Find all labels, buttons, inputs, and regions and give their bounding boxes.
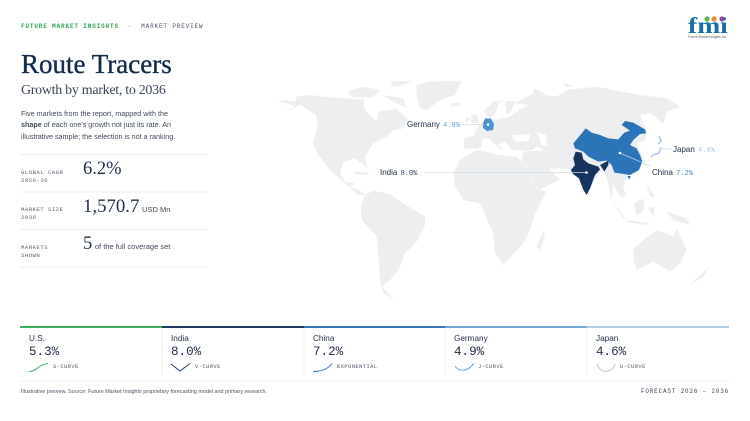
name: Japan: Japan <box>596 334 618 343</box>
value: Germany: 4.9% <box>454 345 484 359</box>
stat: markets shown: MARKETS <box>21 244 48 251</box>
map label: Japan: Japan 4.6% <box>673 145 715 155</box>
label: exponential: EXPONENTIAL <box>337 364 378 370</box>
subtitle: Growth by market, to 2036 <box>21 83 166 98</box>
stat: global CAGR: 6.2% <box>83 159 122 179</box>
name: Germany: Germany <box>454 334 488 343</box>
leader: Japan <box>660 148 672 150</box>
leader: India <box>424 172 586 174</box>
logo: Future Market Insights Inc. <box>688 34 727 38</box>
name: China: China <box>313 334 334 343</box>
map label: China: China 7.2% <box>652 168 693 178</box>
map label: Germany: Germany 4.9% <box>407 120 460 130</box>
curve: S-curve <box>29 363 48 372</box>
stat: markets shown: SHOWN <box>21 252 40 259</box>
marker dots <box>487 123 621 174</box>
intro text: Five markets from the report, mapped with the <box>21 108 168 118</box>
eyebrow: FUTURE MARKET INSIGHTS · MARKET PREVIEW <box>21 23 203 30</box>
country: China <box>573 121 646 179</box>
logo: fmi <box>688 13 728 38</box>
intro text: illustrative sample; the selection is not a ranking. <box>21 132 175 141</box>
curve: V-curve <box>170 363 190 372</box>
label: J-curve: J-CURVE <box>478 364 504 370</box>
label: U-curve: U-CURVE <box>620 364 646 370</box>
map label: India: India 8.0% <box>380 168 417 178</box>
intro text: shape of each one's growth not just its rate. An <box>21 120 171 129</box>
stat: global CAGR: 2026-36 <box>21 176 48 184</box>
name: India: India <box>171 334 189 343</box>
forecast range: FORECAST 2026 – 2036 <box>641 388 729 395</box>
value: U.S.: 5.3% <box>29 345 59 359</box>
stat: global CAGR: GLOBAL CAGR <box>21 168 63 176</box>
curve: exponential <box>313 363 332 372</box>
curve: J-curve <box>454 363 474 371</box>
stat: global CAGR <box>21 159 122 184</box>
country: Germany <box>483 118 494 131</box>
market strip <box>20 326 729 382</box>
value: Japan: 4.6% <box>596 345 626 359</box>
stat: market size <box>21 196 170 221</box>
name: U.S.: U.S. <box>29 334 45 343</box>
intro text <box>21 108 175 141</box>
label: S-curve: S-CURVE <box>53 364 79 370</box>
stat: markets shown: 5 of the full coverage set <box>83 234 170 254</box>
curve: U-curve <box>596 363 616 372</box>
source note: Illustrative preview. Source: Future Market Insights proprietary forecasting model and primary research. <box>21 388 267 394</box>
leader: China <box>620 153 650 166</box>
leader: Germany <box>460 124 484 126</box>
value: India: 8.0% <box>171 345 201 359</box>
stat: markets shown <box>21 234 170 259</box>
country: India <box>571 152 608 195</box>
stat: market size: MARKET SIZE <box>21 206 63 213</box>
stat: market size: 1,570.7 USD Mn <box>83 196 170 217</box>
label: V-curve: V-CURVE <box>195 364 221 370</box>
value: China: 7.2% <box>313 345 343 359</box>
country: Japan <box>651 136 661 157</box>
stat: market size: 2036 <box>21 214 36 221</box>
stats dividers <box>20 154 208 268</box>
title: Route Tracers <box>21 49 172 79</box>
